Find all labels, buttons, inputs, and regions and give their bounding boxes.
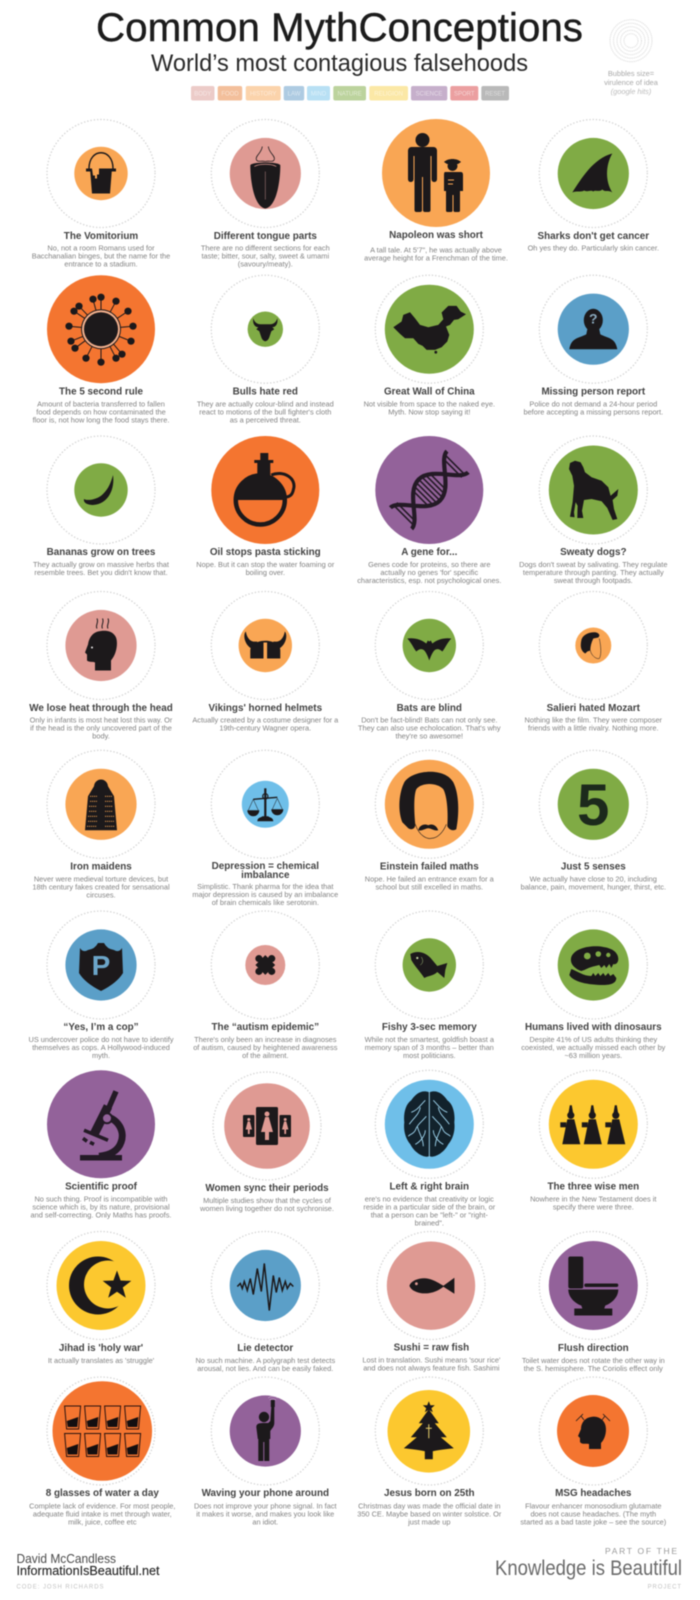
title: Left & right brain [390, 1182, 469, 1192]
icon: banana [84, 475, 113, 505]
description: an idiot. [252, 1517, 278, 1526]
description: adequate fluid intake is met through water, [33, 1509, 172, 1518]
description: No such machine. A polygraph test detects [195, 1356, 335, 1365]
bubble [65, 769, 137, 840]
legend: bubble size: (google hits) [611, 87, 652, 96]
bubble [549, 446, 638, 534]
icon: number 5: 5 [577, 773, 609, 838]
bubble [224, 1083, 310, 1169]
description: average height for a Frenchman of the time. [364, 253, 508, 262]
bubble [385, 1080, 474, 1169]
category filter buttons [191, 86, 509, 100]
description: they're so awesome! [396, 732, 463, 741]
bubble [239, 619, 292, 672]
description: specify there were three. [553, 1202, 634, 1211]
description: Genes code for proteins, so there are [368, 560, 491, 569]
icon: Christmas tree [404, 1401, 454, 1459]
bubble [74, 463, 128, 517]
title: Napoleon was short [389, 230, 484, 241]
icon: viking helmet [244, 632, 286, 658]
icon: Salieri hair [581, 632, 601, 659]
title: Just 5 senses [561, 862, 626, 872]
icon: tall man and Napoleon [408, 133, 463, 212]
title: Waving your phone around [202, 1488, 329, 1499]
description: It actually translates as 'struggle' [48, 1356, 155, 1365]
icon: map of China [393, 306, 466, 354]
panel: Different tongue parts [201, 120, 330, 269]
title: Different tongue parts [214, 231, 317, 242]
bubble [549, 1241, 638, 1330]
description: Myth. Now stop saying it! [388, 407, 470, 416]
legend: bubble size [604, 20, 659, 96]
description: Actually created by a costume designer for a [192, 716, 339, 725]
title: MSG headaches [555, 1488, 632, 1499]
icon: microscope [80, 1091, 122, 1158]
description: There's only been an increase in diagnoses [194, 1035, 337, 1044]
footer: credits: InformationIsBeautiful.net [16, 1563, 160, 1578]
icon: goldfish [410, 952, 447, 978]
description: major depression is caused by an imbalance [192, 890, 338, 899]
description: most politicians. [403, 1051, 456, 1060]
panel: Humans lived with dinosaurs [521, 911, 666, 1060]
description: reside in a particular side of the brain, or [363, 1202, 496, 1211]
title: Scientific proof [65, 1182, 138, 1192]
title: Sharks don't get cancer [538, 231, 649, 242]
category filter buttons: RELIGION [374, 92, 403, 98]
bubble [575, 628, 611, 664]
title: Einstein failed maths [380, 862, 479, 872]
description: Multiple studies show that the cycles of [203, 1196, 332, 1205]
description: before accepting a missing persons report. [523, 407, 663, 416]
icon: anonymous person [569, 309, 617, 349]
bubble [245, 945, 285, 985]
description: that a person can be "left-" or "right- [371, 1210, 488, 1219]
description: We actually have close to 20, including [530, 874, 657, 883]
bubble [65, 929, 137, 1001]
panel: Bananas grow on trees [33, 436, 169, 577]
category filter buttons: SCIENCE [416, 92, 442, 98]
description: Christmas day was made the official date in [358, 1501, 501, 1510]
bubble [230, 1250, 301, 1321]
icon: Einstein face [399, 772, 458, 838]
description: circuses. [86, 890, 116, 899]
description: 18th century fakes created for sensational [32, 882, 170, 891]
description: Nothing like the film. They were composer [525, 716, 663, 725]
description: They actually grow on massive herbs that [33, 560, 169, 569]
bubble [230, 1395, 301, 1467]
title: imbalance [241, 870, 290, 881]
bubble [558, 769, 629, 840]
description: does not cause headaches. (The myth [530, 1509, 656, 1518]
description: of autism, caused by heightened awareness [193, 1043, 338, 1052]
description: coexisted, we actually missed each other by [521, 1043, 666, 1052]
panel: Fishy 3-sec memory [365, 911, 495, 1060]
description: ere's no evidence that creativity or logic [365, 1194, 494, 1203]
panel: The "autism epidemic" [193, 911, 338, 1060]
category filter buttons: BODY [194, 92, 211, 98]
description: as a perceived threat. [230, 415, 301, 424]
title: Humans lived with dinosaurs [525, 1022, 662, 1033]
title: Great Wall of China [384, 386, 475, 398]
panel: Vikings' horned helmets [192, 592, 339, 733]
description: Despite 41% of US adults thinking they [529, 1035, 657, 1044]
description: of the ailment. [242, 1051, 289, 1060]
panel: A gene for... [357, 436, 501, 585]
title: Salieri hated Mozart [547, 703, 641, 714]
description: Toilet water does not rotate the other way in [522, 1356, 665, 1365]
title: Common MythConceptions [96, 6, 583, 50]
description: the S. hemisphere. The Coriolis effect only [524, 1364, 663, 1373]
description: Not visible from space to the naked eye. [364, 399, 495, 408]
title: The “autism epidemic” [212, 1022, 319, 1033]
description: floor is, not how long the food stays there. [33, 415, 169, 424]
icon: eight glasses [65, 1406, 141, 1456]
title: Depression = chemical [212, 861, 319, 872]
description: friends with a little rivalry. Nothing more. [528, 724, 659, 733]
icon: bull head [253, 318, 277, 341]
description: balance, pain, movement, hunger, thirst, etc. [521, 882, 666, 891]
description: characteristics, esp. not psychological ones. [357, 576, 501, 585]
bubble [388, 1390, 470, 1473]
description: Does not improve your phone signal. In fact [194, 1501, 337, 1510]
description: Don't be fact-blind! Bats can not only see. [361, 716, 497, 725]
panel: Waving your phone around [194, 1377, 337, 1526]
icon: head with headache [576, 1414, 610, 1449]
category filter buttons: SPORT [454, 92, 475, 98]
panel: Bats are blind [358, 592, 501, 741]
bubble [211, 436, 319, 544]
title: Bulls hate red [233, 386, 298, 398]
icon: police badge: P [92, 950, 110, 981]
description: Never were medieval torture devices, but [34, 874, 168, 883]
icon: crescent and star [69, 1256, 132, 1314]
title: The Vomitorium [64, 231, 138, 242]
description: entrance to a stadium. [64, 260, 138, 269]
description: There are no different sections for each [201, 244, 330, 253]
panel: Sharks don't get cancer [528, 120, 659, 253]
description: if the head is the only uncovered part of the [30, 724, 172, 733]
description: They can also use echolocation. That's why [358, 724, 501, 733]
title: Missing person report [541, 386, 646, 398]
subtitle: World’s most contagious falsehoods [151, 50, 528, 77]
title: Lie detector [237, 1343, 293, 1354]
description: US undercover police do not have to identify [28, 1035, 174, 1044]
icon: iron maiden [85, 780, 117, 830]
panel: Left & right brain [363, 1070, 496, 1227]
description: They are actually colour-blind and instead [197, 399, 334, 408]
panel: Oil stops pasta sticking [196, 436, 335, 577]
title: Women sync their periods [205, 1183, 329, 1194]
panel: Great Wall of China [364, 275, 495, 416]
description: actually no genes 'for' specific [380, 568, 478, 577]
icon: shark fin [572, 154, 612, 192]
footer: project: PART OF THE [605, 1546, 677, 1556]
panel: Bulls hate red [197, 275, 334, 424]
bubble [242, 781, 289, 828]
footer: credits [16, 1551, 160, 1590]
panel: "Yes, I'm a cop" [28, 911, 174, 1060]
description: science which is, by its nature, provisional [32, 1202, 170, 1211]
description: Police do not demand a 24-hour period [529, 399, 657, 408]
bubble [385, 760, 474, 849]
icon: bucket [86, 153, 116, 194]
description: Nowhere in the New Testament does it [530, 1194, 656, 1203]
category filter buttons: FOOD [221, 92, 239, 98]
panel: Lie detector [195, 1232, 335, 1373]
title: 8 glasses of water a day [46, 1488, 159, 1499]
bubble [385, 285, 474, 374]
description: resemble trees. Bet you didn't know that. [34, 568, 168, 577]
description: Dogs don't sweat by salivating. They regulate [519, 560, 667, 569]
icon: police badge [79, 943, 123, 991]
bubble [230, 138, 301, 209]
description: brained". [415, 1218, 444, 1227]
description: women living together do not sychronise. [199, 1204, 334, 1213]
legend: bubble size: virulence of idea [604, 78, 659, 87]
description: No, not a room Romans used for [47, 244, 155, 253]
description: sweat through footpads. [554, 576, 633, 585]
icon: puzzle piece [247, 947, 283, 983]
icon: bacterium [65, 294, 137, 366]
description: school but still excelled in maths. [375, 882, 483, 891]
panel: Einstein failed maths [365, 750, 495, 891]
category filter buttons: MIND [311, 92, 327, 98]
bubble [549, 1080, 638, 1169]
icon: brain [404, 1091, 455, 1157]
title: Jesus born on 25th [384, 1488, 475, 1499]
panel: Depression = chemical imbalance [192, 750, 338, 907]
description: myth. [92, 1051, 110, 1060]
bubble [558, 294, 629, 365]
bubble [65, 610, 137, 681]
title: Fishy 3-sec memory [382, 1022, 477, 1033]
description: and does not always feature fish. Sashimi [363, 1363, 500, 1372]
icon: DNA helix [390, 451, 468, 529]
description: body. [92, 732, 110, 741]
description: memory span of 3 months – better than [365, 1043, 494, 1052]
legend: bubble size: Bubbles size= [608, 69, 654, 78]
icon: toilet [568, 1256, 618, 1316]
panel: Just 5 senses [521, 750, 666, 891]
panel: Women sync their periods [199, 1072, 334, 1213]
description: just made up [407, 1517, 450, 1526]
icon: steaming head [85, 618, 117, 670]
title: We lose heat through the head [29, 703, 173, 714]
panel: Flush direction [522, 1232, 665, 1373]
icon: man waving phone [256, 1396, 277, 1461]
panel: The Vomitorium [32, 120, 170, 269]
panel: Salieri hated Mozart [525, 592, 663, 733]
footer: credits: CODE: JOSH RICHARDS [16, 1584, 104, 1590]
description: (savoury/meaty). [238, 260, 293, 269]
panel: Jesus born on 25th [357, 1377, 502, 1526]
title: Sweaty dogs? [560, 547, 627, 558]
bubble [558, 929, 629, 1001]
description: Only in infants is most heat lost this way. Or [30, 716, 173, 725]
title: Oil stops pasta sticking [210, 547, 321, 558]
title: Vikings' horned helmets [209, 703, 323, 714]
panel: Missing person report [523, 275, 663, 416]
icon: nose and tongue [250, 146, 280, 208]
description: Oh yes they do. Particularly skin cancer. [528, 244, 659, 253]
panel: Scientific proof [31, 1070, 171, 1219]
description: No such thing. Proof is incompatible with [34, 1194, 168, 1203]
icon: fish [409, 1278, 454, 1294]
description: ~63 million years. [564, 1051, 622, 1060]
description: Amount of bacteria transferred to fallen [37, 399, 165, 408]
category filter buttons: LAW [288, 92, 301, 98]
description: Nope. But it can stop the water foaming or [196, 560, 335, 569]
bubble [382, 119, 490, 227]
bubble [74, 147, 128, 200]
description: it makes it worse, and makes you look like [196, 1509, 334, 1518]
category filter buttons: NATURE [337, 92, 362, 98]
bubble [47, 275, 155, 383]
description: milk, juice, coffee etc [68, 1517, 137, 1526]
panel: The three wise men [530, 1070, 656, 1211]
description: started as a bad taste joke – see the source) [520, 1517, 666, 1526]
icon: oil bottle [236, 453, 294, 524]
title: Sushi = raw fish [394, 1342, 469, 1354]
description: 19th-century Wagner opera. [219, 724, 311, 733]
category filter buttons: RESET [485, 92, 505, 98]
description: taste; bitter, sour, salty, sweet & umami [201, 252, 329, 261]
icon: T-rex skull [569, 946, 618, 985]
description: Simplistic. Thank pharma for the idea that [197, 882, 333, 891]
description: Complete lack of evidence. For most people, [29, 1501, 175, 1510]
description: Nope. He failed an entrance exam for a [365, 874, 495, 883]
title: Bananas grow on trees [47, 547, 156, 558]
bubble [53, 1381, 152, 1481]
title: Bats are blind [397, 703, 462, 714]
bubble [558, 138, 629, 209]
panel: Iron maidens [32, 750, 170, 899]
description: Bacchanalian binges, but the name for the [32, 252, 170, 261]
footer: credits: David McCandless [16, 1551, 116, 1566]
bubble [557, 1395, 629, 1467]
icon: three wise men [560, 1105, 625, 1144]
bubble [403, 619, 456, 672]
footer: project [495, 1546, 682, 1590]
title: The 5 second rule [59, 386, 143, 398]
icon: dog [569, 461, 618, 520]
panel: Jihad is 'holy war' [47, 1232, 155, 1365]
icon: bat [407, 638, 451, 660]
description: 350 CE. Maybe based on winter solstice. Or [357, 1509, 502, 1518]
description: boiling over. [246, 568, 285, 577]
description: of brain chemicals like serotonin. [212, 898, 319, 907]
title: A gene for... [401, 547, 458, 558]
bubble [248, 312, 283, 347]
icon: scales [247, 788, 283, 821]
description: temperature through panting. They actually [523, 568, 664, 577]
title: The three wise men [547, 1182, 639, 1192]
bubble [47, 1070, 155, 1178]
category filter buttons: HISTORY [250, 92, 276, 98]
title: Flush direction [558, 1343, 629, 1354]
bubble [375, 436, 483, 544]
panel: 8 glasses of water a day [29, 1377, 175, 1526]
icon: polygraph wave [237, 1264, 293, 1310]
panel: Napoleon was short [364, 119, 508, 262]
description: Lost in translation. Sushi means 'sour rice' [362, 1355, 501, 1364]
description: arousal, not lies. And can be easily faked. [197, 1364, 333, 1373]
panel: MSG headaches [520, 1377, 666, 1526]
title: Jihad is 'holy war' [59, 1343, 143, 1354]
bubble [56, 1241, 146, 1330]
icon: three women in panels [243, 1107, 291, 1145]
description: food depends on how contaminated the [36, 407, 166, 416]
description: Flavour enhancer monosodium glutamate [525, 1501, 662, 1510]
description: A tall tale. At 5'7", he was actually above [370, 245, 502, 254]
description: While not the smartest, goldfish boast a [365, 1035, 495, 1044]
description: react to motions of the bull fighter's cloth [199, 407, 331, 416]
panel: The 5 second rule [33, 275, 169, 424]
title: Iron maidens [70, 862, 132, 872]
title: “Yes, I’m a cop” [63, 1022, 139, 1033]
footer: project: PROJECT [648, 1584, 681, 1590]
bubble [387, 1242, 475, 1330]
description: and self-correcting. Only Maths has proofs. [31, 1210, 171, 1219]
panel: We lose heat through the head [29, 592, 173, 741]
icon: anonymous person: ? [589, 311, 598, 327]
panel: Sweaty dogs? [519, 436, 667, 585]
bubble [403, 938, 456, 992]
description: themselves as cops. A Hollywood-induced [32, 1043, 170, 1052]
panel: Sushi = raw fish [362, 1232, 501, 1372]
